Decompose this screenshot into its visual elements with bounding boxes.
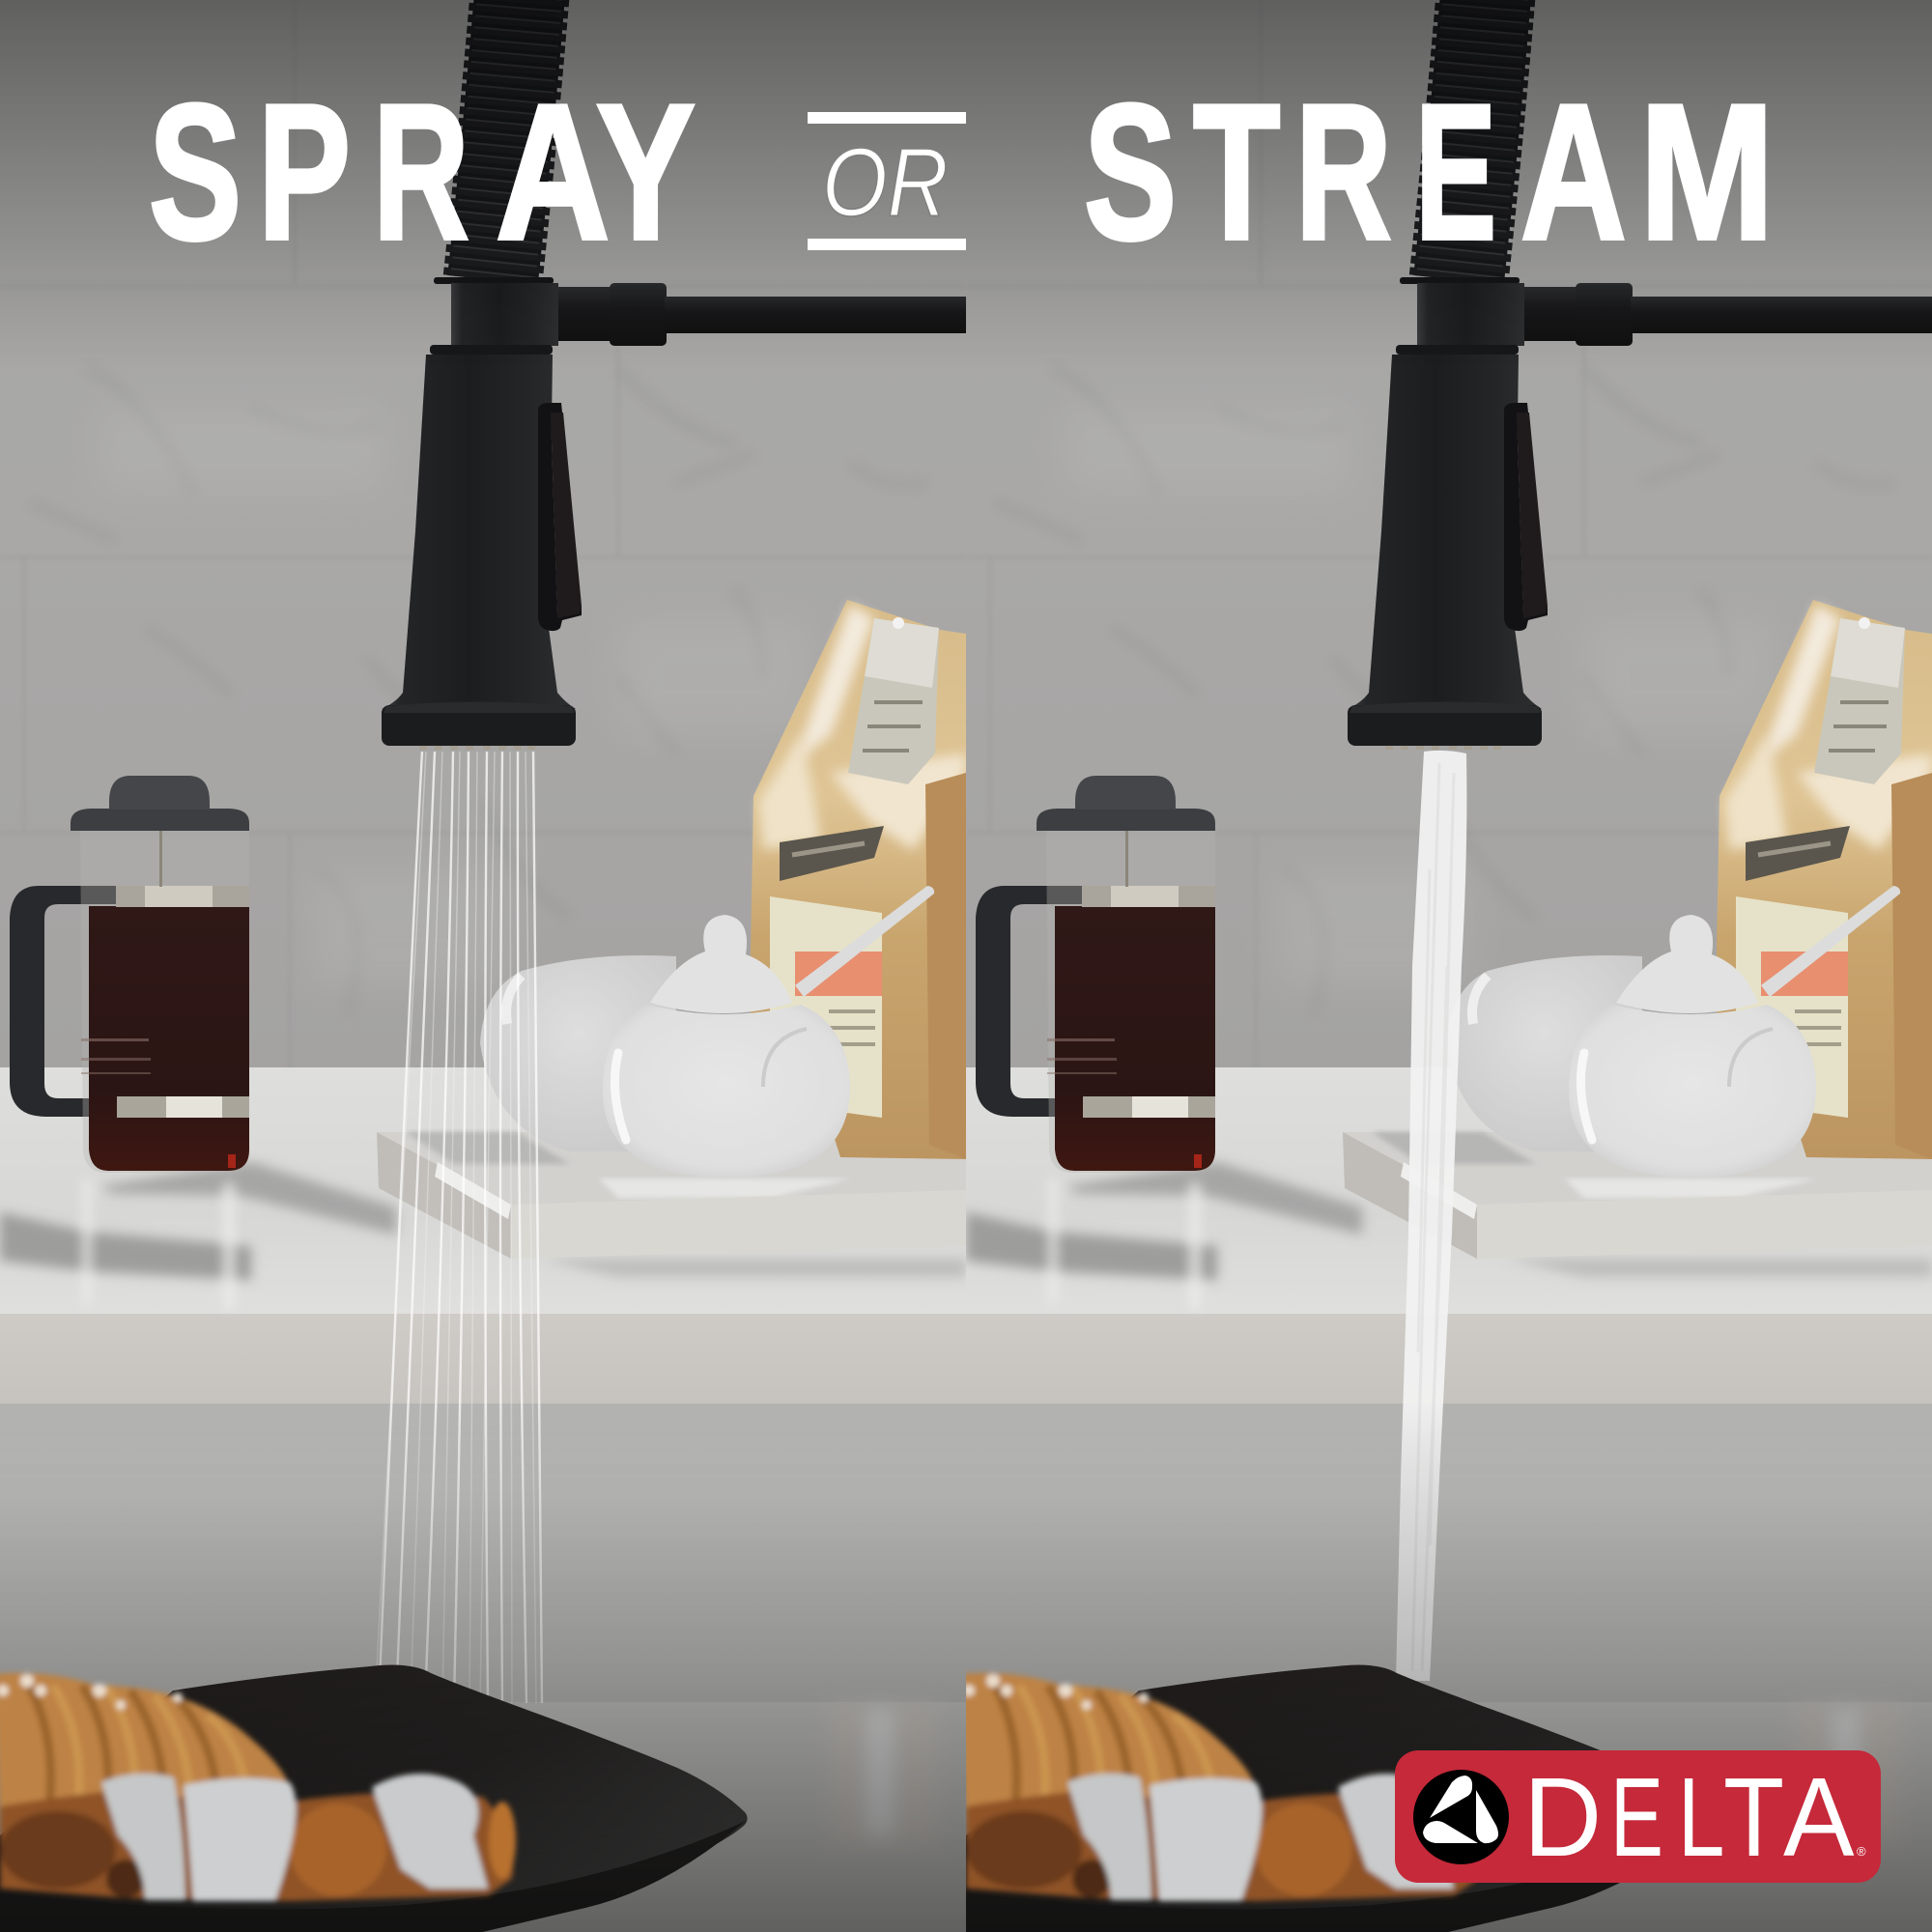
wordmark: DELTA: E: [1610, 1755, 1663, 1880]
panel: spray photo: [0, 0, 966, 1932]
water stream: [1396, 751, 1466, 1681]
heading: STREAM: E: [1415, 66, 1496, 280]
coffee bag: [1717, 600, 1932, 1159]
heading: SPRAY: A: [496, 63, 610, 280]
french press carafe: [976, 776, 1215, 1173]
faucet: [1348, 0, 1932, 750]
wordmark: DELTA: L: [1678, 1754, 1724, 1880]
faucet: [382, 0, 966, 750]
plate: [966, 1665, 1714, 1932]
creamer: [1457, 955, 1642, 1132]
heading: STREAM: M: [1639, 65, 1775, 280]
plate: [0, 1665, 748, 1932]
wordmark: DELTA: D: [1523, 1755, 1602, 1880]
coffee bag: [751, 600, 966, 1159]
heading: OR with rules: [808, 112, 966, 250]
pastry left: [0, 1673, 516, 1901]
countertop and cabinet: [966, 1067, 1932, 1932]
wordmark: DELTA: [1523, 1754, 1866, 1880]
heading: OR with rules: OR: [822, 128, 948, 236]
heading: STREAM: A: [1520, 64, 1627, 280]
heading: SPRAY: P: [258, 64, 351, 279]
countertop and cabinet: [0, 1067, 966, 1932]
wall tiles: [0, 0, 966, 1072]
panel: stream photo: [966, 0, 1932, 1932]
water spray: [375, 752, 542, 1703]
heading: STREAM: [1084, 64, 1775, 280]
heading: SPRAY: [149, 63, 696, 280]
wordmark: DELTA: T: [1723, 1755, 1784, 1880]
icon: Delta emblem: [1413, 1770, 1509, 1864]
heading: SPRAY: Y: [596, 63, 696, 280]
white tray: [377, 1132, 966, 1259]
pastry right: [961, 1673, 1482, 1901]
heading: SPRAY: R: [373, 65, 469, 280]
wall tiles: [966, 0, 1932, 1072]
white tray: [1343, 1132, 1932, 1259]
heading: SPRAY: S: [149, 64, 242, 279]
heading: STREAM: S: [1084, 64, 1177, 279]
logo: Delta: [1395, 1750, 1881, 1883]
heading: STREAM: T: [1193, 65, 1280, 280]
wordmark: DELTA: A: [1783, 1754, 1855, 1880]
heading: STREAM: R: [1295, 65, 1392, 280]
french press carafe: [10, 776, 249, 1173]
sugar bowl: [603, 886, 934, 1178]
wordmark: DELTA: ®: [1857, 1844, 1866, 1859]
sugar bowl: [1569, 886, 1900, 1178]
creamer: [480, 955, 676, 1151]
